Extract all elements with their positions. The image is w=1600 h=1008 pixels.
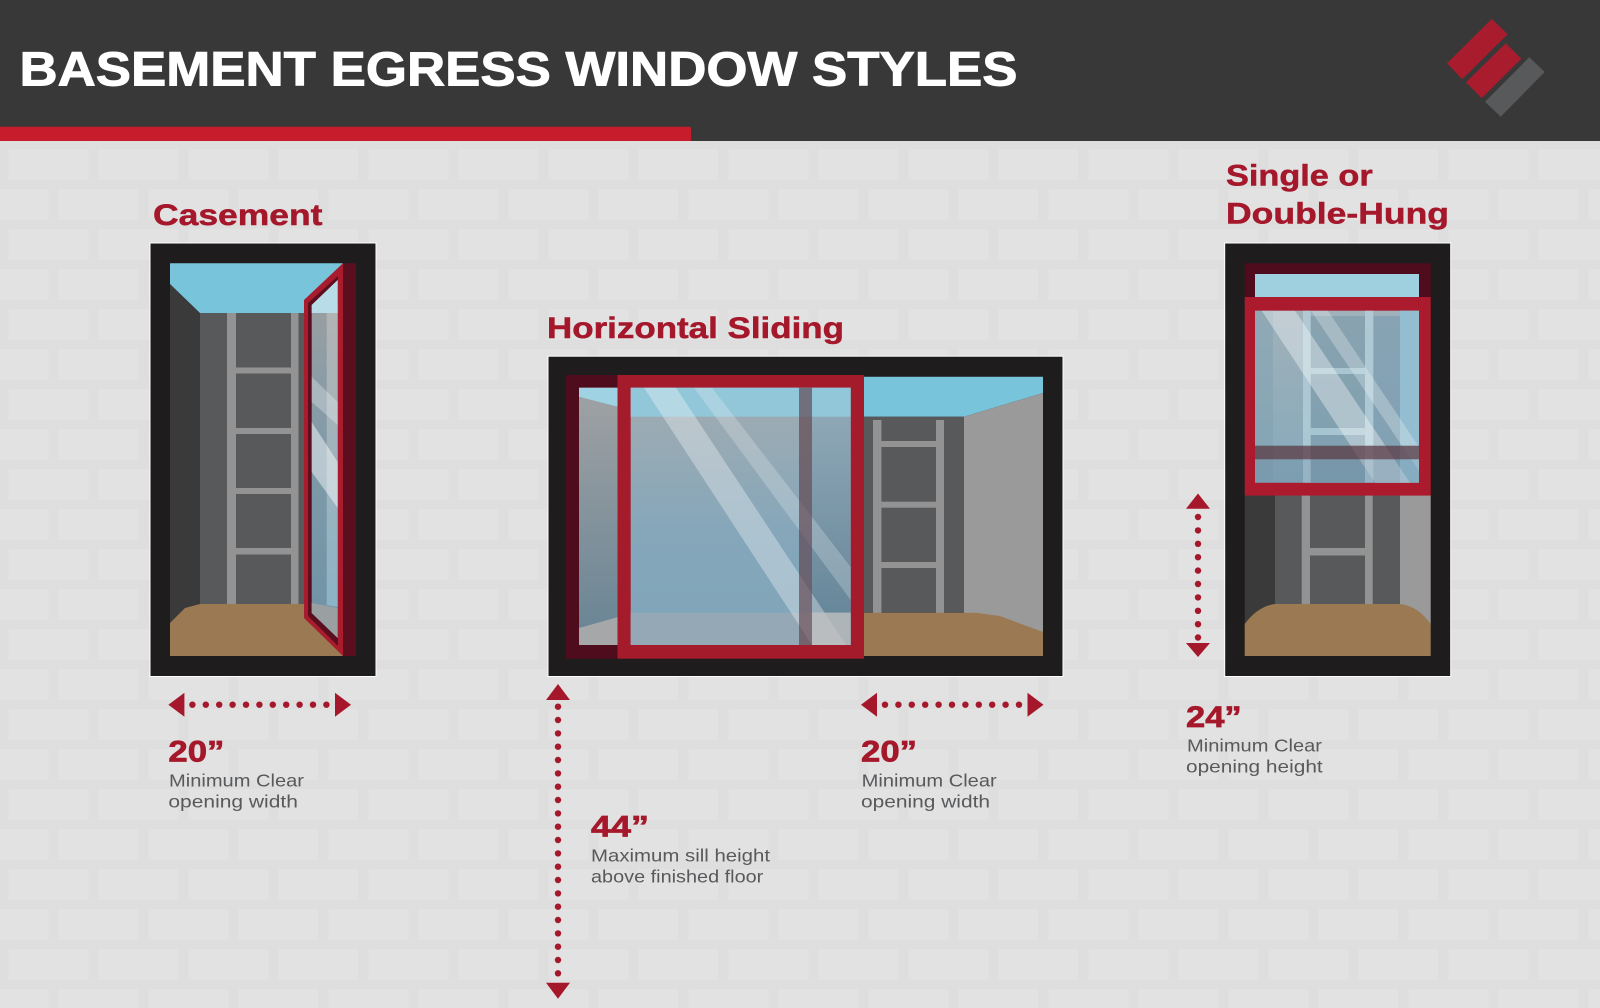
callout: hung 24 inch: 24” bbox=[1186, 701, 1242, 734]
callout: sliding 20 inch bbox=[861, 736, 997, 811]
window illustration: horizontal sliding bbox=[548, 356, 1064, 677]
callout: sliding 20 inch: Minimum Clear bbox=[862, 771, 997, 791]
arrow: opening height bbox=[1186, 494, 1210, 657]
callout: sill height 44 inch: above finished floor bbox=[591, 866, 763, 886]
callout: sliding 20 inch: 20” bbox=[861, 736, 917, 769]
heading: Horizontal Sliding: Horizontal Sliding bbox=[547, 312, 844, 345]
lower sash bbox=[1245, 297, 1431, 496]
header band bbox=[0, 0, 1600, 141]
window illustration: single or double-hung bbox=[1224, 242, 1451, 677]
arrow: casement width bbox=[168, 693, 351, 717]
callout: sill height 44 inch: Maximum sill height bbox=[591, 846, 770, 866]
heading: Single or Double-Hung bbox=[1226, 160, 1449, 230]
ladder bbox=[227, 313, 298, 604]
arrow: sliding width bbox=[861, 693, 1044, 717]
callout: casement 20 inch bbox=[168, 736, 304, 811]
callout: hung 24 inch: Minimum Clear bbox=[1187, 736, 1322, 756]
callout: hung 24 inch bbox=[1186, 701, 1323, 777]
callout: sliding 20 inch: opening width bbox=[861, 791, 990, 811]
ladder bbox=[1302, 495, 1373, 605]
callout: hung 24 inch: opening height bbox=[1186, 757, 1323, 777]
rear sliding sash bbox=[566, 375, 618, 659]
callout: casement 20 inch: Minimum Clear bbox=[169, 771, 304, 791]
heading: Single or Double-Hung: Double-Hung bbox=[1226, 197, 1449, 230]
icon: company logo bbox=[1447, 19, 1545, 117]
heading: Single or Double-Hung: Single or bbox=[1226, 160, 1373, 192]
front sliding sash bbox=[618, 375, 864, 659]
title: BASEMENT EGRESS WINDOW STYLES bbox=[20, 44, 1017, 96]
callout: casement 20 inch: opening width bbox=[168, 791, 298, 811]
callout: sill height 44 inch: 44” bbox=[591, 811, 649, 844]
arrow: sill height bbox=[546, 684, 570, 999]
ladder bbox=[873, 420, 944, 613]
upper sash bbox=[1245, 263, 1431, 297]
callout: casement 20 inch: 20” bbox=[168, 736, 224, 769]
heading: Casement: Casement bbox=[153, 199, 322, 232]
window illustration: casement bbox=[150, 242, 376, 677]
callout: sill height 44 inch bbox=[591, 811, 770, 886]
open casement sash bbox=[304, 263, 343, 656]
red accent bar bbox=[0, 127, 691, 141]
